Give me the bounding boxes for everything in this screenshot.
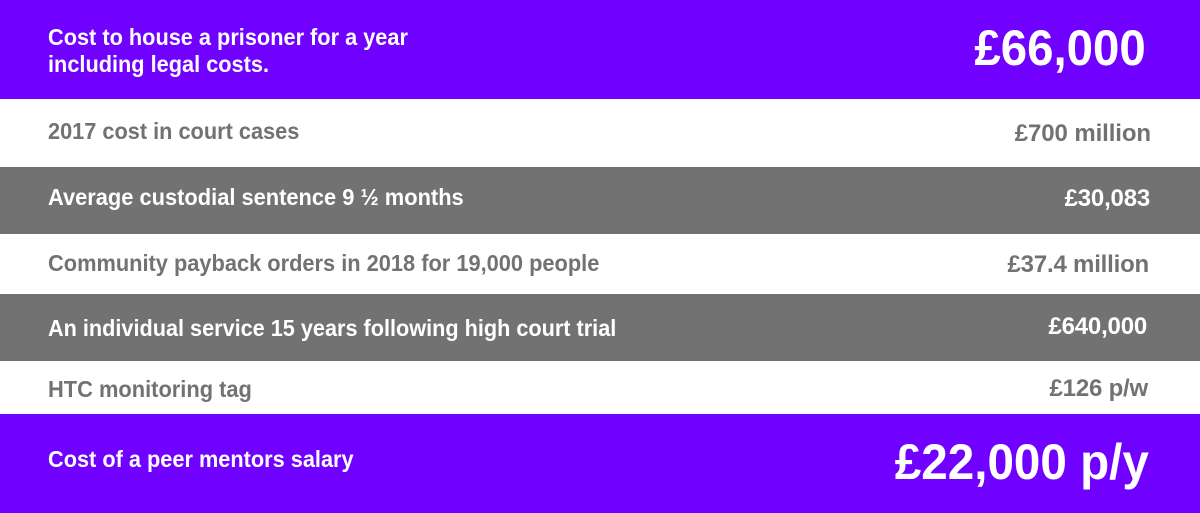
panel: peer mentor salary band	[0, 414, 1200, 513]
text: community payback label: Community payback orders in 2018 for 19,000 people	[48, 250, 599, 276]
text: custodial sentence label: Average custodial sentence 9 ½ months	[48, 184, 464, 210]
value: 66,000: £66,000	[975, 20, 1146, 76]
value: 640,000: £640,000	[1048, 313, 1147, 340]
text: prisoner cost label: including legal costs.	[48, 51, 269, 77]
value: 126 per week: £126 p/w	[1050, 375, 1148, 402]
value: 30,083: £30,083	[1065, 185, 1150, 212]
text: prisoner cost label: Cost to house a prisoner for a year	[48, 24, 408, 50]
panel: monitoring tag row	[0, 361, 1200, 414]
panel: prisoner cost band	[0, 0, 1200, 99]
panel: individual service row	[0, 294, 1200, 361]
value: 22,000 per year: £22,000 p/y	[895, 434, 1149, 490]
panel: custodial sentence row	[0, 167, 1200, 234]
panel: community payback row	[0, 234, 1200, 294]
text: monitoring tag label: HTC monitoring tag	[48, 376, 252, 402]
text: individual service label: An individual service 15 years following high court trial	[48, 315, 616, 341]
text: court cases label: 2017 cost in court cases	[48, 118, 299, 144]
text: prisoner cost label	[48, 24, 408, 77]
panel: court cases row	[0, 99, 1200, 167]
value: 700 million: £700 million	[1015, 120, 1151, 147]
text: peer mentor label: Cost of a peer mentors salary	[48, 446, 354, 472]
value: 37.4 million: £37.4 million	[1008, 251, 1149, 278]
